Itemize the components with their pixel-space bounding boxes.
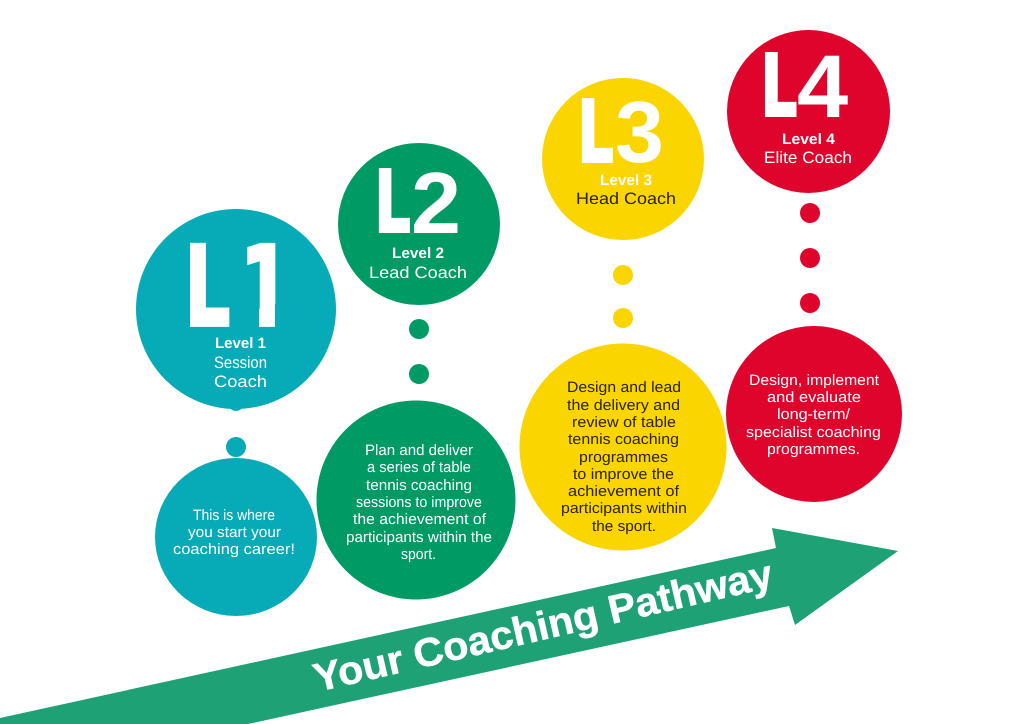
level 2 description: Plan and deliver	[365, 442, 473, 459]
badge: L4	[761, 36, 849, 137]
badge: L2: L	[375, 152, 410, 252]
level 2 description: participants within the	[346, 529, 492, 546]
badge: L4: L	[761, 36, 797, 136]
level 3 description: programmes	[579, 449, 668, 466]
badge: L1	[185, 223, 291, 351]
level 2 description: the achievement of	[353, 511, 487, 528]
level 3 description: tennis coaching	[568, 431, 679, 448]
level 2 description	[316, 400, 516, 600]
level 3 description: to improve the	[573, 466, 674, 483]
level 3 description: the sport.	[592, 518, 656, 535]
level 2 title	[369, 245, 467, 282]
level 4 description	[726, 326, 902, 502]
level 1 description: coaching career!	[173, 541, 295, 558]
level 3 title	[576, 172, 676, 208]
level 4 description: Design, implement	[749, 372, 880, 389]
level 1 description: you start your	[188, 524, 281, 541]
arrow: coaching pathway	[0, 528, 898, 724]
level 3 title: Level 3	[600, 172, 652, 189]
level 2 title: Lead Coach	[369, 264, 467, 282]
badge: L1: 1	[240, 223, 291, 351]
level 4 description: long-term/	[777, 406, 851, 423]
level 4 title: Level 4	[782, 131, 836, 148]
level 3 title: Head Coach	[576, 190, 676, 208]
level 3 description: the delivery and	[567, 397, 680, 414]
badge: L3: 3	[615, 84, 664, 181]
badge: L2: 2	[411, 155, 461, 252]
level 2 description: sessions to improve	[356, 494, 482, 511]
level 1 title	[214, 335, 267, 391]
level 1 title: Session	[214, 354, 267, 372]
badge: L4: 4	[797, 37, 849, 137]
level 3 description: Design and lead	[567, 379, 681, 396]
level 1 title: Level 1	[215, 335, 266, 352]
level 3 description: achievement of	[568, 483, 680, 500]
level 4 description: programmes.	[767, 441, 860, 458]
badge: L3: L	[578, 82, 613, 182]
level 4 description: specialist coaching	[746, 424, 881, 441]
level 3 description	[520, 344, 726, 550]
level 4 title: Elite Coach	[764, 149, 852, 167]
level 2 description: sport.	[401, 546, 436, 563]
panel: level 3	[520, 78, 726, 550]
panel: level 1	[136, 209, 336, 616]
level 2 description: a series of table	[367, 459, 471, 476]
level 1 description	[155, 458, 317, 616]
badge: L1: L	[185, 223, 230, 351]
badge: L2	[375, 152, 461, 252]
arrow label: Your Coaching Pathway	[309, 552, 778, 701]
level 4 title	[764, 131, 852, 167]
level 1 description: This is where	[193, 507, 275, 524]
level 1 title: Coach	[214, 373, 267, 391]
level 3 description: review of table	[572, 414, 676, 431]
level 4 description: and evaluate	[767, 389, 861, 406]
level 2 title: Level 2	[392, 245, 444, 262]
badge: L3	[578, 82, 664, 182]
panel: level 4	[726, 30, 902, 502]
panel: level 2	[316, 143, 516, 600]
level 2 description: tennis coaching	[366, 477, 472, 494]
level 3 description: participants within	[561, 500, 687, 517]
